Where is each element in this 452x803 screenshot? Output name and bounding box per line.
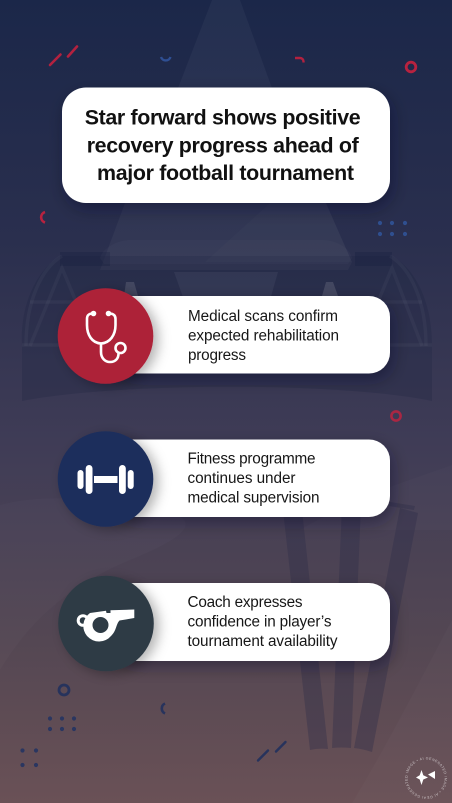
decor: red dashes top left bbox=[50, 46, 77, 65]
decor: blue arc bbox=[161, 57, 170, 60]
panel: coach confidence bbox=[58, 576, 390, 671]
icon: dumbbell bbox=[78, 465, 134, 494]
text: continues under bbox=[188, 470, 296, 487]
red icon circle bbox=[58, 288, 153, 384]
title text: Star forward shows positive bbox=[85, 106, 361, 130]
card bbox=[112, 296, 390, 374]
text: medical supervision bbox=[188, 490, 320, 506]
background: curved field shapes bbox=[0, 465, 452, 803]
icon: stethoscope bbox=[87, 312, 126, 362]
decor: red ring top right bbox=[406, 62, 416, 72]
text: confidence in player’s bbox=[188, 614, 332, 630]
text: progress bbox=[188, 347, 246, 364]
card bbox=[112, 440, 390, 517]
navy icon circle bbox=[58, 431, 153, 527]
title panel bbox=[62, 88, 390, 203]
decor: navy dashes bbox=[258, 742, 286, 760]
slate icon circle bbox=[58, 576, 154, 671]
text: expected rehabilitation bbox=[188, 328, 339, 344]
background: floodlight beams bbox=[100, 0, 352, 270]
panel: medical scans bbox=[58, 288, 390, 384]
title text: major football tournament bbox=[97, 161, 354, 185]
text: Coach expresses bbox=[188, 594, 303, 611]
decor: navy dots bbox=[48, 716, 76, 731]
decor: red arc bbox=[295, 58, 304, 62]
panel: fitness programme bbox=[58, 431, 390, 527]
background: cricket stumps bbox=[283, 502, 418, 752]
decor: blue dots bbox=[378, 221, 407, 236]
icon: sparkle bbox=[416, 770, 435, 785]
watermark badge: AI GENERATED IMAGE • AI GENERATED IMAGE • AI GENERATED bbox=[405, 757, 447, 799]
text: Medical scans confirm bbox=[188, 308, 338, 325]
decor: red ring middle right bbox=[391, 411, 401, 421]
text: Fitness programme bbox=[188, 450, 316, 468]
title text: recovery progress ahead of bbox=[87, 134, 360, 158]
decor: navy ring bottom left bbox=[59, 685, 69, 695]
icon: whistle bbox=[78, 610, 134, 642]
background: stadium silhouette bbox=[22, 240, 432, 401]
card bbox=[112, 583, 390, 661]
decor: navy dots corner bbox=[20, 748, 38, 767]
decor: red crescent bbox=[41, 212, 45, 222]
decor: navy crescent bbox=[162, 704, 165, 714]
text: tournament availability bbox=[188, 633, 338, 650]
